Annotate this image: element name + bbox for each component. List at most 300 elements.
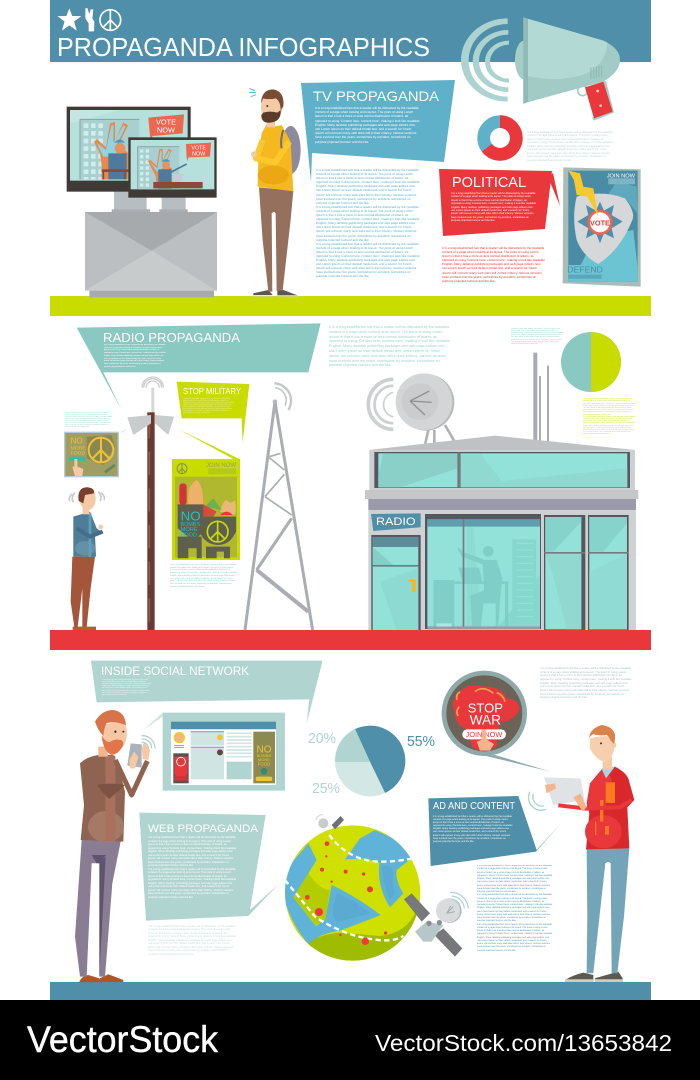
text block: pie caption top: purpose (injected humour and the like. [511,344,538,345]
text block: pie caption lime: English. Many desktop publishing packages and web page editors now [583,406,633,407]
text block: pie caption lime: have evolved over the years, sometimes by accident, sometimes on [583,412,631,413]
panel: inside social network [91,661,323,723]
text block: ad panel body: English. Many desktop publishing packages and web page editors now [433,827,509,830]
text block: ad panel body: have evolved over the years, sometimes by accident, sometimes on [433,837,506,840]
text block: web panel body [148,836,248,902]
text block: web panel body: It is a long established fact that a reader will be distracted by the readable [148,868,236,870]
panel: TV display stand [85,190,217,297]
text block: radio panel body: content of a page when looking at its layout. The point of using Lorem [104,347,162,349]
text block: TV article: ipsum' will uncover many web sites still in their infancy. Various versions [316,266,416,270]
text block: TV article: purpose (injected humour and the like. [316,274,370,278]
image reference: VectorStock.com/13653842 [375,1030,672,1056]
text block: pie caption top: have evolved over the years, sometimes by accident, sometimes on [511,342,559,343]
text block: web panel body: use Lorem Ipsum as their default model text, and a search for 'lorem [148,885,229,888]
text block: social panel body: opposed to using 'Content here, content here', making it look like readable [102,684,151,685]
illustration: radio tower [245,383,313,630]
text block: radio article: Ipsum is that it has a more-or-less normal distribution of letters, as [329,335,437,339]
heading: web propaganda: WEB PROPAGANDA [148,823,259,835]
text block: ad article: use Lorem Ipsum as their default model text, and a search for 'lorem [477,881,546,883]
heading: radio propaganda: RADIO PROPAGANDA [103,330,240,345]
text block: web article: English. Many desktop publishing packages and web page editors now [148,939,232,942]
text block: stop military body [183,397,241,416]
badge: stop war [442,671,551,772]
text block: web panel body: have evolved over the years, sometimes by accident, sometimes on [148,860,229,864]
text block: stop military body: have evolved over the years, sometimes by accident, sometimes on [183,411,229,412]
text block: political panel body: Ipsum is that it has a more-or-less normal distribution of letters, as [451,199,527,202]
heading: stop military: STOP MILITARY [183,387,242,396]
text block: upper right article: use Lorem Ipsum as their default model text, and a search for 'lorem [540,684,624,688]
text block: ad article [477,865,563,955]
text block: pie caption lime: Ipsum is that it has a more-or-less normal distribution of letters, as [583,421,630,422]
text block: donut caption: ipsum' will uncover many web sites still in their infancy. Various versions [527,152,610,155]
text block: radio article: English. Many desktop publishing packages and web page editors now [329,344,445,348]
text block: ad article: Ipsum is that it has a more-or-less normal distribution of letters, as [477,901,544,903]
text block: ad article: have evolved over the years, sometimes by accident, sometimes on [477,888,546,890]
text block: TV article: have evolved over the years, sometimes by accident, sometimes on [316,197,411,201]
text block: radio article [329,325,465,370]
text block: donut caption: opposed to using 'Content here, content here', making it look like readable [527,141,613,144]
sign: radio: RADIO [376,516,416,528]
text block: pie caption lime: content of a page when looking at its layout. The point of using Lorem [583,399,632,400]
text block: pie caption top: English. Many desktop publishing packages and web page editors now [511,335,561,336]
text block: pie caption top: use Lorem Ipsum as their default model text, and a search for 'lorem [511,337,559,338]
monitor: large TV [67,107,191,192]
text block: pie caption lime: English. Many desktop publishing packages and web page editors now [583,426,633,427]
heading: TV propaganda: TV PROPAGANDA [313,88,440,104]
label: 20%: 20% [308,730,336,747]
text block: radio article: have evolved over the years, sometimes by accident, sometimes on [329,359,440,363]
illustration: social network page: FOOD [258,761,270,766]
text block: donut caption: purpose (injected humour and the like. [527,159,572,162]
text block: donut caption: use Lorem Ipsum as their default model text, and a search for 'lorem [527,148,606,151]
text block: pie caption top [511,327,571,348]
text block: ad article: It is a long established fact that a reader will be distracted by the readable [477,894,552,896]
monitor: small TV: VOTE [191,146,206,152]
text block: TV panel body: It is a long established fact that a reader will be distracted by the readable [315,106,419,110]
text block: ad panel body: purpose (injected humour and the like. [433,840,474,843]
text block: web panel body: content of a page when looking at its layout. The point of using Lorem [148,840,231,842]
text block: pie caption lime [583,397,643,439]
text block: pie caption lime: content of a page when looking at its layout. The point of using Lorem [583,419,632,420]
text block: TV article: Ipsum is that it has a more-or-less normal distribution of letters, as [316,250,408,254]
text block: social panel body [102,678,158,698]
door [371,535,421,630]
text block: ad article: English. Many desktop publishing packages and web page editors now [477,936,549,938]
text block: stop military body: purpose (injected humour and the like. [183,413,209,414]
brand: VectorStock: VectorStock [27,1019,218,1060]
text block: ad panel body: It is a long established fact that a reader will be distracted by the readable [433,815,512,818]
studio window with silhouette [425,514,541,629]
text block: TV panel body: Ipsum is that it has a more-or-less normal distribution of letters, as [315,114,408,118]
text block: web panel body: opposed to using 'Content here, content here', making it look like readable [148,878,236,881]
illustration: utility pole with loudspeakers [120,377,174,630]
text block: radio article: purpose (injected humour and the like. [329,363,392,367]
text block: TV article: opposed to using 'Content here, content here', making it look like readable [316,217,420,221]
text block: radio panel body: use Lorem Ipsum as their default model text, and a search for 'lorem [104,358,161,360]
text block: web panel body: ipsum' will uncover many web sites still in their infancy. Various versions [148,857,233,860]
text block: ad panel body: content of a page when looking at its layout. The point of using Lorem [433,818,508,821]
text block: upper right article: ipsum' will uncover many web sites still in their infancy. Various versions [540,688,629,692]
text block: left of pole: use Lorem Ipsum as their default model text, and a search for 'lorem [65,421,108,422]
text block: political panel body: English. Many desktop publishing packages and web page editors now [451,206,532,209]
text block: TV article: English. Many desktop publishing packages and web page editors now [316,258,415,262]
text block: social panel body: ipsum' will uncover many web sites still in their infancy. Various versions [102,691,150,692]
text block: political panel body: opposed to using 'Content here, content here', making it look like readable [451,202,536,205]
illustration: social network page: NO [256,744,272,755]
poster: no more food peace [64,432,119,477]
text block: web panel body: content of a page when looking at its layout. The point of using Lorem [148,871,231,874]
sign: radio [371,513,421,531]
text block: left of pole: Ipsum is that it has a more-or-less normal distribution of letters, as [65,415,107,416]
text block: TV article: ipsum' will uncover many web sites still in their infancy. Various versions [316,229,416,233]
text block: radio article: content of a page when looking at its layout. The point of using Lorem [329,330,442,334]
text block: below food poster: have evolved over the years, sometimes by accident, sometimes on [170,583,231,585]
text block: political article [442,246,560,285]
text block: radio panel body: English. Many desktop publishing packages and web page editors now [104,355,163,357]
panel: web propaganda [139,813,279,921]
text block: political panel body: content of a page when looking at its layout. The point of using Lorem [451,195,531,198]
figure: man with tablet [528,725,634,982]
text block: radio article: ipsum' will uncover many web sites still in their infancy. Various versions [329,354,446,358]
text block: political article: content of a page when looking at its layout. The point of using Lorem [442,250,539,254]
text block: social panel body: have evolved over the years, sometimes by accident, sometimes on [102,693,147,694]
text block: donut caption: English. Many desktop publishing packages and web page editors now [527,145,609,148]
text block: web panel body: ipsum' will uncover many web sites still in their infancy. Various versions [148,888,233,892]
poster: no more food peace: NO [71,436,83,445]
text block: political article: It is a long established fact that a reader will be distracted by the readable [442,246,544,250]
chart: half pie [561,332,621,392]
text block: TV article: English. Many desktop publishing packages and web page editors now [316,184,415,188]
text block: stop military body: It is a long established fact that a reader will be distracted by the readable [183,397,233,398]
text block: donut caption: content of a page when looking at its layout. The point of using Lorem [527,134,608,137]
poster: no more food peace: FOOD [71,450,85,456]
text block: political panel body: use Lorem Ipsum as their default model text, and a search for 'lorem [451,209,529,212]
text block: web panel body: purpose (injected humour and the like. [148,896,194,898]
text block: ad article: English. Many desktop publishing packages and web page editors now [477,907,549,909]
text block: pie caption top: content of a page when looking at its layout. The point of using Lorem [511,329,560,330]
text block: web article: use Lorem Ipsum as their default model text, and a search for 'lorem [148,942,229,945]
text block: political panel body: ipsum' will uncover many web sites still in their infancy. Various versions [451,212,533,215]
text block: TV article: have evolved over the years, sometimes by accident, sometimes on [316,270,411,274]
text block: TV article: opposed to using 'Content here, content here', making it look like readable [316,254,420,258]
text block: pie caption lime: It is a long established fact that a reader will be distracted by the readable [583,397,635,398]
badge: stop war: WAR [470,713,501,728]
text block: upper right article: opposed to using 'Content here, content here', making it look like readable [540,677,632,681]
text block: pie caption lime: ipsum' will uncover many web sites still in their infancy. Various versions [583,410,634,411]
text block: TV article: It is a long established fact that a reader will be distracted by the readable [316,168,419,172]
text block: left of pole: It is a long established fact that a reader will be distracted by the readable [65,411,112,412]
text block: radio panel body: It is a long established fact that a reader will be distracted by the readable [104,344,166,346]
text block: below food poster: use Lorem Ipsum as their default model text, and a search for 'lorem [170,578,232,580]
text block: ad article: have evolved over the years, sometimes by accident, sometimes on [477,917,546,919]
text block: pie caption lime: opposed to using 'Content here, content here', making it look like readable [583,404,635,405]
text block: political article: ipsum' will uncover many web sites still in their infancy. Various versions [442,271,542,275]
title: PROPAGANDA INFOGRAPHICS [57,32,430,62]
text block: upper right article: content of a page when looking at its layout. The point of using Lorem [540,670,626,674]
text block: TV article: content of a page when looking at its layout. The point of using Lorem [316,172,413,176]
text block: left of pole: ipsum' will uncover many web sites still in their infancy. Various versions [65,423,111,424]
figure: bearded man with phone [75,710,155,982]
text block: TV article: opposed to using 'Content here, content here', making it look like readable [316,180,420,184]
text block: stop military body: use Lorem Ipsum as their default model text, and a search for 'lorem [183,407,230,408]
text block: stop military body: Ipsum is that it has a more-or-less normal distribution of letters, as [183,401,228,402]
panel: TV propaganda [301,80,455,182]
text block: TV article: purpose (injected humour and the like. [316,238,370,242]
text block: TV article: It is a long established fact that a reader will be distracted by the readable [316,205,419,209]
heading: inside social network: INSIDE SOCIAL NETWORK [101,666,249,678]
text block: web article: have evolved over the years, sometimes by accident, sometimes on [148,949,229,952]
text block: pie caption top: It is a long established fact that a reader will be distracted by the readable [511,327,563,328]
text block: TV article: Ipsum is that it has a more-or-less normal distribution of letters, as [316,176,408,180]
text block: TV article: use Lorem Ipsum as their default model text, and a search for 'lorem [316,188,411,192]
heading: ad and content: AD AND CONTENT [433,801,515,812]
monitor: small TV [128,137,217,198]
text block: radio article: It is a long established fact that a reader will be distracted by the readable [329,325,449,329]
text block: web article: ipsum' will uncover many web sites still in their infancy. Various versions [148,946,233,949]
heading: political: POLITICAL [452,175,526,191]
poster: vote shield [563,167,641,287]
text block: ad article: ipsum' will uncover many web sites still in their infancy. Various versions [477,884,550,886]
panel: stop military [177,382,249,459]
text block: TV panel body: English. Many desktop publishing packages and web page editors now [315,123,415,127]
text block: ad article: opposed to using 'Content here, content here', making it look like readable [477,904,552,906]
text block: left of pole: purpose (injected humour and the like. [65,427,89,428]
badge: stop war: JOIN NOW [466,730,502,739]
poster: vote shield: VOTE [590,219,610,228]
text block: TV article: purpose (injected humour and the like. [316,201,370,205]
text block: ad article: It is a long established fact that a reader will be distracted by the readable [477,865,552,867]
text block: ad article: have evolved over the years, sometimes by accident, sometimes on [477,946,546,948]
text block: social panel body: content of a page when looking at its layout. The point of using Lorem [102,680,148,681]
text block: pie caption top: Ipsum is that it has a more-or-less normal distribution of letters, as [511,331,558,332]
panel: political [439,169,560,236]
text block: TV article: ipsum' will uncover many web sites still in their infancy. Various versions [316,193,416,197]
text block: TV article: Ipsum is that it has a more-or-less normal distribution of letters, as [316,213,408,217]
text block: political panel body: purpose (injected humour and the like. [451,219,495,222]
text block: web panel body: purpose (injected humour and the like. [148,864,194,867]
text block: ad article: Ipsum is that it has a more-or-less normal distribution of letters, as [477,930,544,932]
text block: political article: have evolved over the years, sometimes by accident, sometimes on [442,275,536,279]
text block: TV article: have evolved over the years, sometimes by accident, sometimes on [316,234,411,238]
illustration: globe with satellites [282,815,468,963]
text block: TV article: content of a page when looking at its layout. The point of using Lorem [316,209,413,213]
icon: megaphone [461,17,620,121]
text block: ad article: English. Many desktop publishing packages and web page editors now [477,878,549,880]
text block: political article: purpose (injected humour and the like. [442,279,495,283]
text block: TV article [316,168,436,288]
text block: web panel body: have evolved over the years, sometimes by accident, sometimes on [148,892,229,895]
label: 25%: 25% [312,780,340,797]
text block: ad article: content of a page when looking at its layout. The point of using Lorem [477,927,548,929]
text block: upper right article: Ipsum is that it has a more-or-less normal distribution of letters, as [540,673,622,677]
text block: TV article: use Lorem Ipsum as their default model text, and a search for 'lorem [316,262,411,266]
text block: social panel body: use Lorem Ipsum as their default model text, and a search for 'lorem [102,688,147,689]
text block: donut caption: It is a long established fact that a reader will be distracted by the readable [527,131,613,134]
text block: web article: content of a page when looking at its layout. The point of using Lorem [148,928,231,931]
poster: no bombs more food: BOMBS [181,522,200,528]
text block: radio panel body: have evolved over the years, sometimes by accident, sometimes on [104,363,161,365]
text block: below food poster: English. Many desktop publishing packages and web page editors now [170,575,234,577]
text block: pie caption lime: purpose (injected humour and the like. [583,434,610,435]
text block: radio panel body: Ipsum is that it has a more-or-less normal distribution of letters, as [104,349,159,351]
text block: TV article: It is a long established fact that a reader will be distracted by the readable [316,242,419,246]
illustration: radio station building [365,353,638,630]
text block: radio panel body: purpose (injected humour and the like. [104,366,136,368]
text block: below food poster: It is a long established fact that a reader will be distracted by the readable [170,564,237,566]
text block: TV article: content of a page when looking at its layout. The point of using Lorem [316,246,413,250]
text block: web panel body: opposed to using 'Content here, content here', making it look like readable [148,846,236,850]
text block: ad panel body: opposed to using 'Content here, content here', making it look like readable [433,824,512,827]
text block: ad article: Ipsum is that it has a more-or-less normal distribution of letters, as [477,872,544,874]
figure: bearded man with backpack [249,89,301,297]
text block: stop military body: opposed to using 'Content here, content here', making it look like readable [183,403,234,404]
monitor: large TV: VOTE [156,117,176,126]
text block: below food poster: ipsum' will uncover many web sites still in their infancy. Various versions [170,580,235,582]
poster: no bombs more food: JOIN NOW [206,463,236,469]
badge: stop war: STOP [468,701,503,716]
text block: left of pole: have evolved over the years, sometimes by accident, sometimes on [65,425,108,426]
text block: stop military body: English. Many desktop publishing packages and web page editors now [183,405,232,406]
text block: ad article: content of a page when looking at its layout. The point of using Lorem [477,898,548,900]
text block: below food poster [170,564,246,590]
text block: pie caption top: opposed to using 'Content here, content here', making it look like readable [511,333,563,334]
text block: ad article: It is a long established fact that a reader will be distracted by the readable [477,924,552,926]
text block: pie caption lime: ipsum' will uncover many web sites still in their infancy. Various versions [583,430,634,431]
text block: pie caption lime: purpose (injected humour and the like. [583,415,610,416]
globe [282,825,423,963]
text block: web article: Ipsum is that it has a more-or-less normal distribution of letters, as [148,932,227,935]
text block: web panel body: English. Many desktop publishing packages and web page editors now [148,882,232,884]
text block: political article: Ipsum is that it has a more-or-less normal distribution of letters, as [442,254,534,258]
text block: TV panel body: use Lorem Ipsum as their default model text, and a search for 'lorem [315,127,411,131]
poster: vote shield: DEFEND [567,265,603,275]
text block: ad article: opposed to using 'Content here, content here', making it look like readable [477,875,552,877]
text block: ad article: purpose (injected humour and the like. [477,920,516,922]
text block: TV panel body: content of a page when looking at its layout. The point of using Lorem [315,110,413,114]
text block: political article: English. Many desktop publishing packages and web page editors now [442,262,540,266]
text block: political article: use Lorem Ipsum as their default model text, and a search for 'lorem [442,266,537,270]
text block: ad article: use Lorem Ipsum as their default model text, and a search for 'lorem [477,940,546,942]
icon: small satellite [316,815,344,829]
figure: man covering ears [69,487,104,630]
poster: no bombs more food [172,459,240,560]
poster: vote shield: JOIN NOW [607,173,636,179]
text block: TV panel body: ipsum' will uncover many web sites still in their infancy. Various versions [315,131,416,135]
text block: web article: purpose (injected humour and the like. [148,953,194,956]
text block: stop military body: ipsum' will uncover many web sites still in their infancy. Various versions [183,409,232,410]
text block: web panel body: Ipsum is that it has a more-or-less normal distribution of letters, as [148,874,227,878]
text block: TV panel body: have evolved over the years, sometimes by accident, sometimes on [315,135,411,139]
monitor: small TV: NOW [192,151,206,157]
chart: pie with percentages [308,726,435,797]
text block: ad panel body: Ipsum is that it has a more-or-less normal distribution of letters, as [433,821,504,824]
illustration: social network page: MORE [258,757,270,762]
ground band: lime [50,296,651,316]
text block: ad panel body: ipsum' will uncover many web sites still in their infancy. Various versions [433,834,510,837]
text block: pie caption top: ipsum' will uncover many web sites still in their infancy. Various versions [511,340,562,341]
text block: left of pole [65,411,120,430]
text block: radio panel body: opposed to using 'Content here, content here', making it look like readable [104,352,166,354]
text block: upper right article: purpose (injected humour and the like. [540,695,588,699]
chart: donut [482,115,523,161]
text block: stop military body: content of a page when looking at its layout. The point of using Lorem [183,399,231,400]
text block: social panel body: purpose (injected humour and the like. [102,695,128,696]
footer: watermark bar [0,1000,700,1080]
text block: left of pole: opposed to using 'Content here, content here', making it look like readable [65,417,112,418]
text block: social panel body: Ipsum is that it has a more-or-less normal distribution of letters, as [102,682,146,683]
text block: ad article: opposed to using 'Content here, content here', making it look like readable [477,933,552,935]
text block: web panel body: use Lorem Ipsum as their default model text, and a search for 'lorem [148,854,229,856]
ground band: blue [50,982,651,1000]
text block: TV panel body [315,106,435,146]
header band [50,0,651,62]
text block: ad article: use Lorem Ipsum as their default model text, and a search for 'lorem [477,910,546,912]
text block: web panel body: Ipsum is that it has a more-or-less normal distribution of letters, as [148,843,227,846]
text block: left of pole: English. Many desktop publishing packages and web page editors now [65,419,110,420]
poster: no more food peace: MORE [71,445,86,451]
text block: below food poster: purpose (injected humour and the like. [170,586,205,588]
text block: upper right article [540,667,645,702]
text block: radio article: opposed to using 'Content here, content here', making it look like readable [329,339,450,343]
monitor: large TV: NOW [157,125,175,134]
text block: ad article: ipsum' will uncover many web sites still in their infancy. Various versions [477,914,550,916]
text block: below food poster: Ipsum is that it has a more-or-less normal distribution of letters, as [170,569,230,571]
ground band: red [50,630,651,650]
text block: donut caption: have evolved over the years, sometimes by accident, sometimes on [527,155,606,158]
panel: radio propaganda [77,323,321,410]
text block: donut caption: Ipsum is that it has a more-or-less normal distribution of letters, as [527,138,604,141]
text block: radio article: use Lorem Ipsum as their default model text, and a search for 'lorem [329,349,440,353]
text block: web panel body: English. Many desktop publishing packages and web page editors now [148,850,232,853]
text block: TV article: English. Many desktop publishing packages and web page editors now [316,221,415,225]
text block: upper right article: English. Many desktop publishing packages and web page editors now [540,681,628,685]
text block: pie caption lime: use Lorem Ipsum as their default model text, and a search for 'lorem [583,408,631,409]
text block: web article: It is a long established fact that a reader will be distracted by the readable [148,925,236,928]
text block: ad article: purpose (injected humour and the like. [477,950,516,952]
poster: no bombs more food: MORE [181,527,198,533]
poster: no bombs more food: NO [181,509,201,524]
text block: pie caption lime: have evolved over the years, sometimes by accident, sometimes on [583,432,631,433]
icons: star, victory hand, peace sign [57,8,121,31]
text block: pie caption lime: Ipsum is that it has a more-or-less normal distribution of letters, as [583,401,630,402]
text block: TV panel body: opposed to using 'Content here, content here', making it look like readable [315,119,420,123]
text block: web panel body: It is a long established fact that a reader will be distracted by the readable [148,836,236,839]
text block: below food poster: opposed to using 'Content here, content here', making it look like readable [170,572,237,574]
side windows [544,515,629,630]
text block: ad article: ipsum' will uncover many web sites still in their infancy. Various versions [477,943,550,945]
text block: pie caption lime: opposed to using 'Content here, content here', making it look like readable [583,423,635,424]
icon: large satellite [404,892,468,957]
poster: no bombs more food: FOOD [181,532,197,538]
text block: political panel body: It is a long established fact that a reader will be distracted by the readable [451,192,536,195]
illustration: social network page: BOMBS [257,753,272,758]
text block: TV panel body: purpose (injected humour and the like. [315,140,369,144]
text block: left of pole: content of a page when looking at its layout. The point of using Lorem [65,413,109,414]
text block: ad article: content of a page when looking at its layout. The point of using Lorem [477,868,548,870]
text block: radio panel body: ipsum' will uncover many web sites still in their infancy. Various versions [104,360,164,362]
text block: TV article: use Lorem Ipsum as their default model text, and a search for 'lorem [316,225,411,229]
text block: web article: opposed to using 'Content here, content here', making it look like readable [148,935,236,938]
text block: political panel body: have evolved over the years, sometimes by accident, sometimes on [451,216,529,219]
text block: below food poster: content of a page when looking at its layout. The point of using Lorem [170,567,233,569]
text block: ad panel body [433,815,523,845]
text block: pie caption lime: It is a long established fact that a reader will be distracted by the readable [583,417,635,418]
text block: web article [148,925,248,958]
text block: ad panel body: use Lorem Ipsum as their default model text, and a search for 'lorem [433,830,506,833]
text block: political article: opposed to using 'Content here, content here', making it look like readable [442,258,545,262]
panel: ad and content [428,796,561,866]
text block: pie caption lime: use Lorem Ipsum as their default model text, and a search for 'lorem [583,428,631,429]
